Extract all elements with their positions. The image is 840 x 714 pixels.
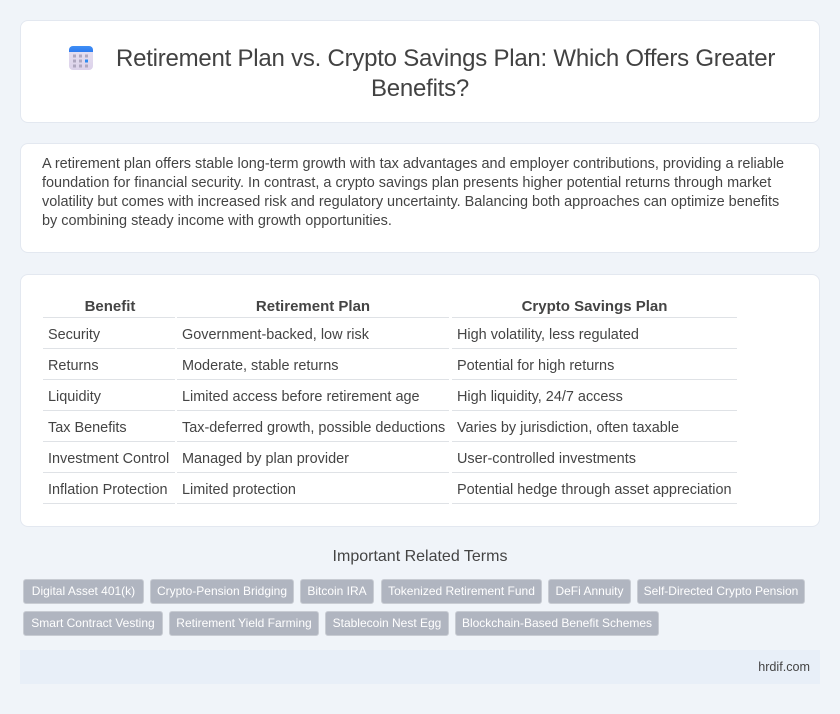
title: Benefits?	[371, 75, 469, 102]
table header row: Benefit	[85, 298, 135, 315]
related term tags: Crypto-Pension Bridging	[157, 584, 287, 598]
footer bar	[20, 650, 820, 684]
row: Security: Security	[48, 327, 100, 343]
comparison table panel: Retirement Plan	[256, 298, 370, 315]
comparison table panel: Potential hedge through asset appreciation	[457, 482, 732, 498]
intro panel	[20, 143, 820, 253]
row: Returns: Returns	[48, 358, 99, 374]
comparison table panel: Tax-deferred growth, possible deductions	[182, 420, 445, 436]
related term tags: Stablecoin Nest Egg	[333, 616, 441, 630]
related term tags: Self-Directed Crypto Pension	[644, 584, 798, 598]
intro text: by combining steady income with growth opportunities.	[42, 213, 392, 229]
related term tags: Tokenized Retirement Fund	[388, 584, 535, 598]
intro text: volatility but comes with increased risk and regulatory uncertainty. Balancing both approaches can optimize benefits	[42, 194, 779, 210]
comparison table panel: Limited protection	[182, 482, 296, 498]
comparison table panel: Moderate, stable returns	[182, 358, 338, 374]
icon: calendar	[69, 46, 93, 70]
row: Inflation Protection: Inflation Protection	[48, 482, 168, 498]
related term tags: Smart Contract Vesting	[31, 616, 155, 630]
comparison table panel: Limited access before retirement age	[182, 389, 420, 405]
comparison table panel	[20, 274, 820, 527]
related term tags: Bitcoin IRA	[307, 584, 367, 598]
comparison table panel: Managed by plan provider	[182, 451, 349, 467]
comparison table panel: Varies by jurisdiction, often taxable	[457, 420, 679, 436]
related terms heading: Important Related Terms	[333, 548, 507, 565]
intro text: A retirement plan offers stable long-term growth with tax advantages and employer contributions, providing a reliable	[42, 156, 784, 172]
footer source: hrdif.com	[758, 660, 810, 674]
related term tags: Retirement Yield Farming	[176, 616, 312, 630]
related term tags: DeFi Annuity	[555, 584, 624, 598]
related term tags	[23, 579, 805, 636]
header panel	[20, 20, 820, 123]
comparison table panel: High volatility, less regulated	[457, 327, 639, 343]
related term tags: Digital Asset 401(k)	[32, 584, 135, 598]
related term tags: Blockchain-Based Benefit Schemes	[462, 616, 652, 630]
row: Investment Control: Investment Control	[48, 451, 169, 467]
intro text	[42, 156, 784, 229]
comparison table panel: Government-backed, low risk	[182, 327, 369, 343]
comparison table panel: Potential for high returns	[457, 358, 614, 374]
comparison table panel: High liquidity, 24/7 access	[457, 389, 623, 405]
title	[116, 45, 775, 102]
row: Tax Benefits: Tax Benefits	[48, 420, 127, 436]
intro text: foundation for financial security. In contrast, a crypto savings plan presents higher potential returns through market	[42, 175, 771, 191]
comparison table panel: Crypto Savings Plan	[522, 298, 667, 315]
row: Liquidity: Liquidity	[48, 389, 101, 405]
title: Retirement Plan vs. Crypto Savings Plan: Which Offers Greater	[116, 45, 775, 72]
comparison table panel: User-controlled investments	[457, 451, 636, 467]
